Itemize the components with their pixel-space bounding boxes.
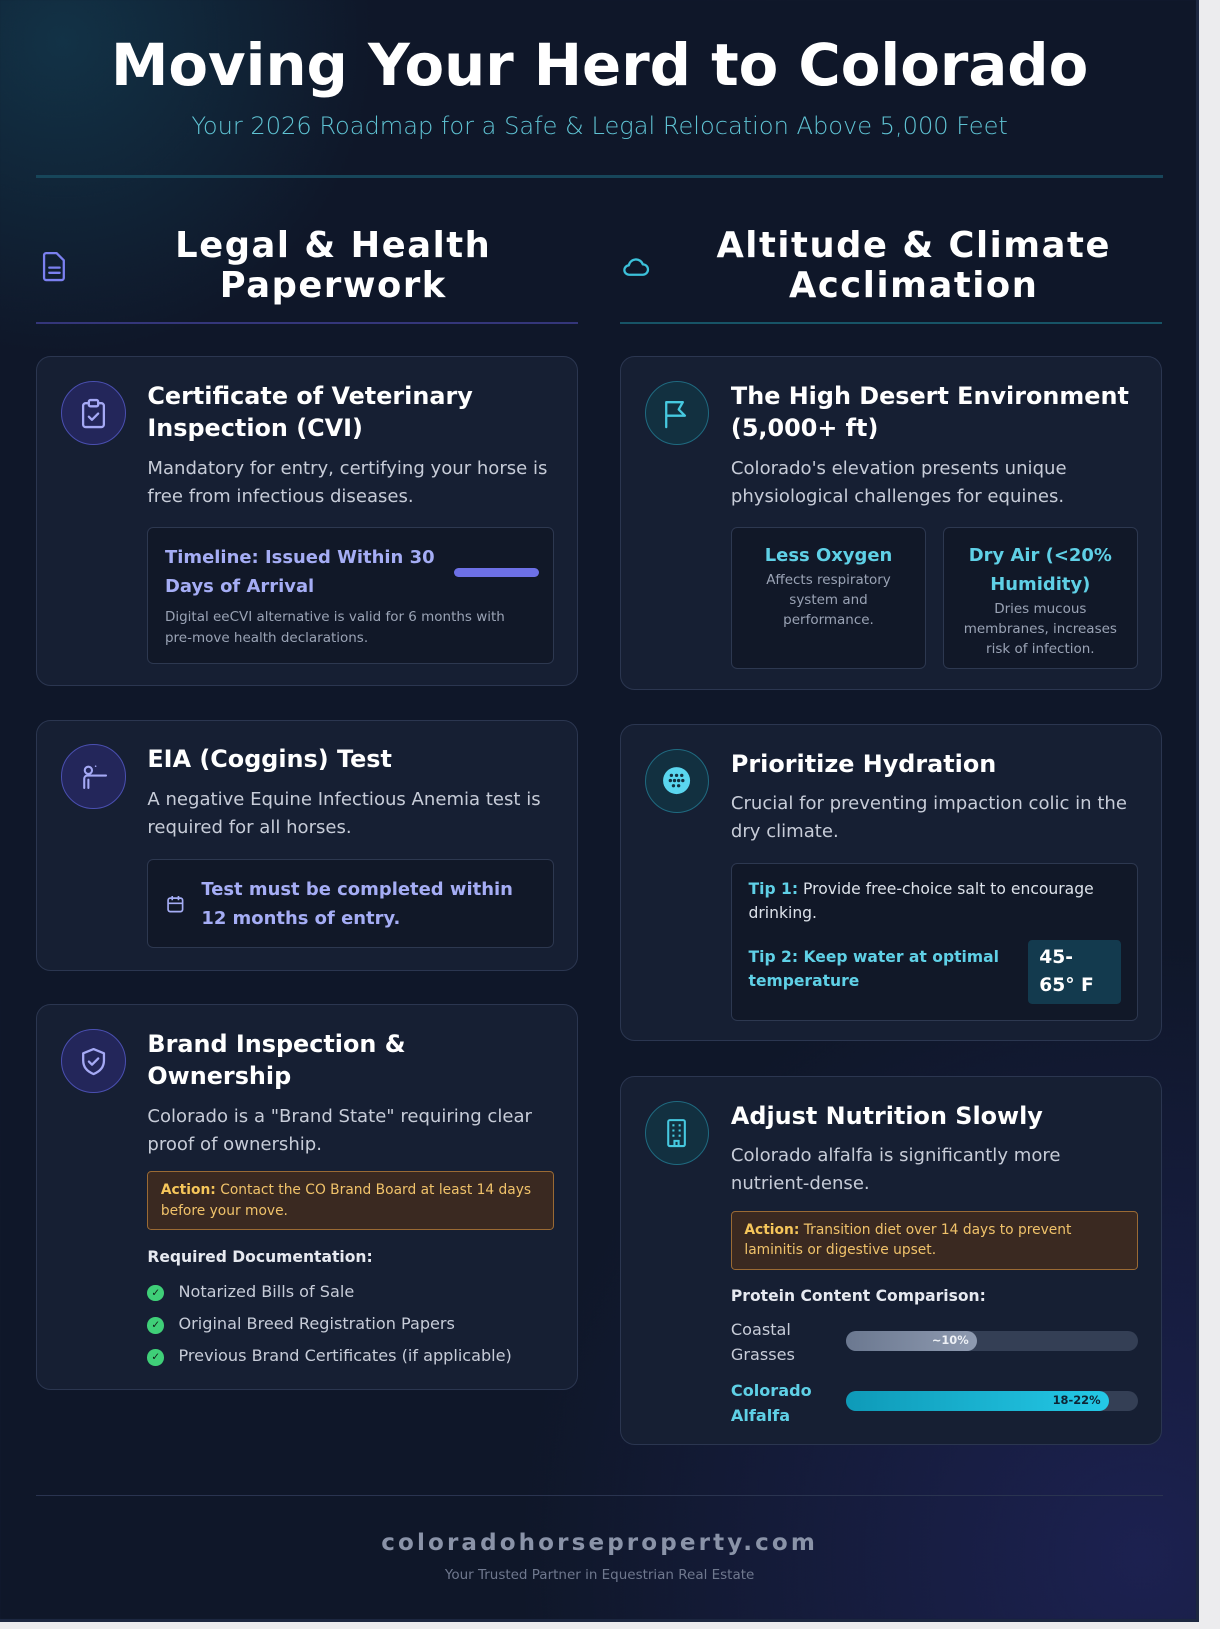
icon: cloud [623,258,650,276]
documentation list: Required Documentation: [147,1248,373,1266]
protein bar chart: Colorado [731,1381,812,1400]
protein bar chart: 18-22% [1053,1393,1101,1407]
protein bar chart: Alfalfa [731,1406,790,1425]
card: CVI [36,356,578,686]
protein bar chart: Protein Content Comparison: [731,1287,986,1305]
protein bar chart: ~10% [932,1333,969,1347]
temperature badge: 45- [1039,947,1073,968]
icon: flag [645,381,709,445]
documentation list [147,1248,512,1366]
temperature badge [1028,940,1121,1004]
action callout: Action: Transition diet over 14 days to prevent laminitis or digestive upset. [744,1222,1071,1258]
heading text: Altitude & Climate [716,225,1111,266]
icon: person [61,744,126,809]
card: hydration: Crucial for preventing impaction colic in the dry climate. [731,793,1127,842]
card: EIA: A negative Equine Infectious Anemia test is required for all horses. [147,789,541,838]
action callout: Action: Contact the CO Brand Board at least 14 days before your move. [161,1182,531,1219]
card: EIA [36,720,578,971]
card: nutrition: nutrient-dense. [731,1173,870,1194]
footer: Your Trusted Partner in Equestrian Real Estate [445,1567,754,1583]
heading text: Acclimation [789,265,1038,306]
card: high desert: Colorado's elevation presents unique physiological challenges for equines. [731,458,1067,507]
card: hydration: Prioritize Hydration [731,750,996,778]
heading text: Paperwork [220,265,447,306]
documentation list: ✓ [151,1319,160,1331]
timeline box: Digital eeCVI alternative is valid for 6 months with pre-move health declarations. [165,609,505,646]
icon: shield [61,1029,126,1093]
card: hydration [620,724,1162,1041]
card: high desert [620,356,1162,690]
card: nutrition: Adjust Nutrition Slowly [731,1102,1043,1130]
protein bar chart: Coastal [731,1320,791,1339]
card: nutrition: Colorado alfalfa is significantly more [731,1145,1060,1166]
documentation list: ✓ [151,1287,160,1299]
icon: clipboard [61,381,126,445]
card: Brand: Colorado is a "Brand State" requiring clear proof of ownership. [147,1106,532,1155]
icon: document [42,252,65,282]
stat: less oxygen: Affects respiratory system and performance. [766,572,891,628]
icon: water [645,749,709,813]
protein bar chart [731,1287,1138,1425]
card: high desert: The High Desert Environment (5,000+ ft) [731,382,1129,442]
timeline box [147,527,554,664]
section heading: legal [36,218,578,324]
heading text [175,225,491,306]
stat: less oxygen: Less Oxygen [765,545,892,566]
stat: dry air: Dries mucous membranes, increases risk of infection. [964,601,1117,657]
documentation list: Notarized Bills of Sale [179,1282,354,1301]
tips box: Tip 2: Keep water at optimal temperature [749,948,999,990]
action callout [147,1171,554,1230]
card: CVI: Certificate of Veterinary Inspection (CVI) [147,382,473,442]
footer: coloradohorseproperty.com [381,1530,818,1556]
icon: calendar [167,896,184,912]
documentation list: Original Breed Registration Papers [179,1314,455,1333]
tips box [731,863,1138,1021]
stat: dry air: Humidity) [990,574,1090,595]
heading text [716,225,1111,306]
action callout [731,1211,1138,1270]
icon: building [645,1101,709,1165]
subtitle: Your 2026 Roadmap for a Safe & Legal Relocation Above 5,000 Feet [191,112,1008,140]
stat: less oxygen [731,527,926,669]
temperature badge: 65° F [1039,975,1094,996]
test callout [147,859,554,948]
title: Moving Your Herd to Colorado [111,31,1088,99]
test callout: Test must be completed within 12 months of entry. [201,879,513,929]
section heading: altitude [620,218,1162,324]
stat: dry air [943,527,1138,669]
documentation list: Previous Brand Certificates (if applicable) [179,1346,512,1365]
tips box: Tip 1: Provide free-choice salt to encourage drinking. [749,880,1094,922]
card: nutrition [620,1076,1162,1445]
heading text: Legal & Health [175,225,491,266]
stat: dry air: Dry Air (<20% [969,545,1112,566]
protein bar chart: Grasses [731,1345,795,1364]
stat boxes [731,527,1138,669]
timeline box: Timeline: Issued Within 30 Days of Arrival [165,547,435,597]
documentation list: ✓ [151,1351,160,1363]
card: CVI: Mandatory for entry, certifying your horse is free from infectious diseases. [147,458,547,507]
card: Brand [36,1004,578,1390]
card: Brand: Ownership [147,1062,291,1090]
footer [381,1530,818,1583]
card: Brand: Brand Inspection & [147,1030,406,1058]
card: EIA: EIA (Coggins) Test [147,745,392,773]
